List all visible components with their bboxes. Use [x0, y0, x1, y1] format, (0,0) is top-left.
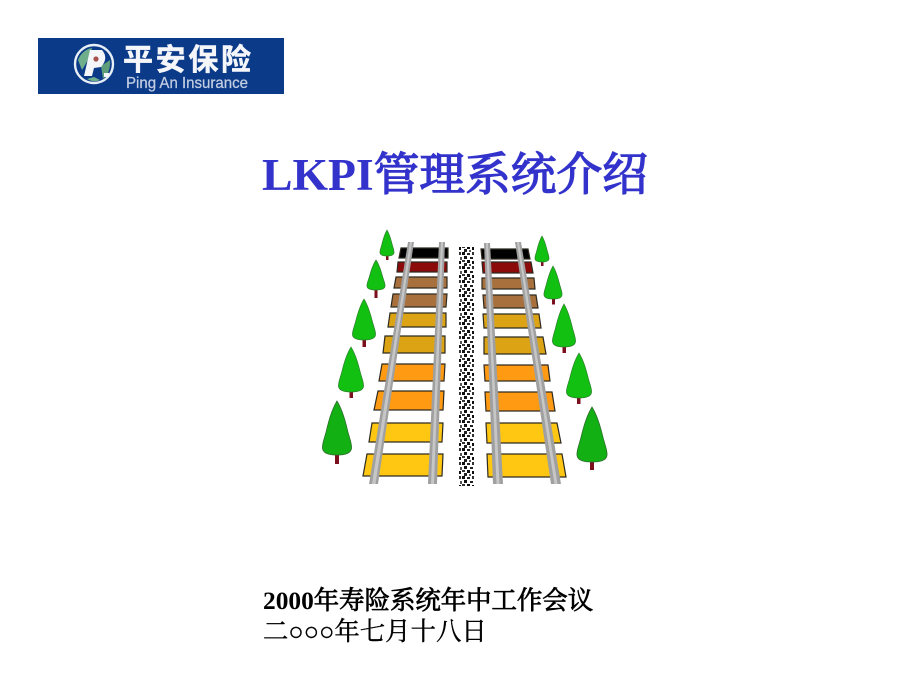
conference text block: [263, 587, 593, 646]
left track rails: [369, 242, 445, 484]
illustration: railway with trees: [322, 230, 607, 486]
tree: [544, 266, 562, 304]
tree: [352, 299, 376, 347]
tree: [566, 353, 592, 404]
tree: [552, 304, 576, 353]
tree: [322, 401, 352, 464]
gravel strip between tracks: [459, 247, 474, 486]
icon: globe with letter P: [75, 45, 113, 83]
tree: [535, 236, 549, 266]
right track sleepers: [481, 249, 566, 477]
title: LKPI管理系统介绍: [262, 149, 648, 200]
tree: [367, 260, 385, 298]
meeting name: 2000年寿险系统年中工作会议: [263, 587, 593, 615]
logo English name: Ping An Insurance: [126, 75, 248, 92]
right track rails: [484, 242, 561, 484]
logo Chinese name: 平安保险: [123, 35, 251, 79]
tree: [577, 407, 607, 470]
left track sleepers: [363, 248, 448, 476]
date: 二○○○年七月十八日: [263, 618, 487, 646]
tree: [338, 347, 364, 398]
logo: Ping An Insurance: [38, 35, 284, 94]
tree: [380, 230, 394, 260]
